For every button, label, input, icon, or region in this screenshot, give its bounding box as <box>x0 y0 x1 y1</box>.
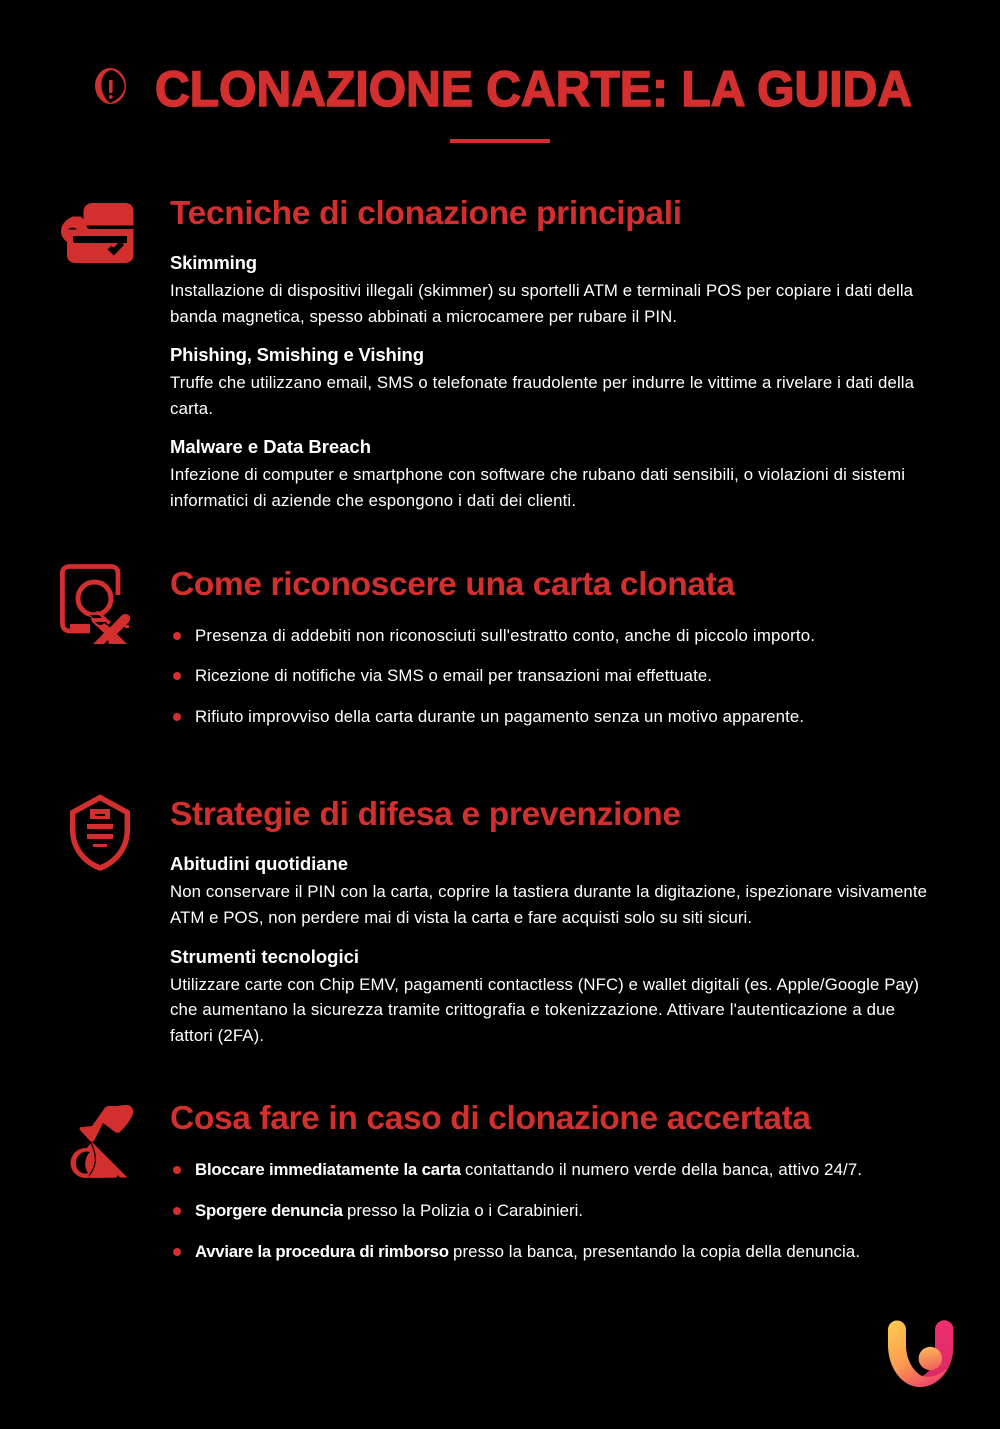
subsection: abitudini <box>170 853 927 927</box>
heading: Strategie di difesa e prevenzione <box>170 796 681 833</box>
subsection: abitudini: ATM e POS, non perdere mai di vista la carta e fare acquisti solo su siti sicuri. <box>170 908 752 927</box>
bullet list: Ricezione di notifiche via SMS o email per transazioni mai effettuate. <box>195 666 712 685</box>
subsection: strumenti: Utilizzare carte con Chip EMV, pagamenti contactless (NFC) e wallet digitali (es. Apple/Google Pay) <box>170 975 919 994</box>
panel: strategie di difesa <box>73 796 927 1045</box>
icon: shield <box>73 798 127 868</box>
bullet list: Sporgere denuncia <box>195 1201 344 1220</box>
subsection: malware: informatici di aziende che espongono i dati dei clienti. <box>170 491 576 510</box>
header <box>95 61 912 143</box>
subsection: skimming <box>170 252 914 326</box>
subsection: skimming: Installazione di dispositivi illegali (skimmer) su sportelli ATM e terminali POS per copiare i dati della <box>170 281 914 300</box>
bullet list: Bloccare immediatamente la carta <box>195 1160 462 1179</box>
title underline <box>450 139 550 143</box>
subsection: malware <box>170 436 905 510</box>
subsection: phishing <box>170 344 915 418</box>
subsection: malware: Infezione di computer e smartphone con software che rubano dati sensibili, o violazioni di sistemi <box>170 465 905 484</box>
subsection: abitudini: Non conservare il PIN con la carta, coprire la tastiera durante la digitazione, ispezionare visivamente <box>170 882 927 901</box>
subsection: strumenti <box>170 946 919 1045</box>
panel: riconoscere una carta clonata <box>62 566 815 726</box>
bullet list: presso la banca, presentando la copia della denuncia. <box>453 1242 860 1261</box>
bullet list: Presenza di addebiti non riconosciuti sull'estratto conto, anche di piccolo importo. <box>195 626 815 645</box>
icon: credit card <box>61 203 134 263</box>
heading: Cosa fare in caso di clonazione accertata <box>170 1100 811 1137</box>
panel: tecniche di clonazione <box>61 195 915 510</box>
bullet list: contattando il numero verde della banca, attivo 24/7. <box>465 1160 862 1179</box>
logo <box>888 1320 954 1387</box>
icon: check, shield and warning <box>70 1105 133 1178</box>
subsection: strumenti: fattori (2FA). <box>170 1026 264 1045</box>
subsection: abitudini: Abitudini quotidiane <box>170 853 348 874</box>
subsection: strumenti: che aumentano la sicurezza tramite crittografia e tokenizzazione. Attivare l'autenticazione a due <box>170 1000 895 1019</box>
bullet list: presso la Polizia o i Carabinieri. <box>347 1201 583 1220</box>
title: CLONAZIONE CARTE: LA GUIDA <box>155 61 912 117</box>
panel: cosa fare <box>70 1100 862 1261</box>
icon: alert <box>95 68 126 104</box>
subsection: phishing: carta. <box>170 399 213 418</box>
bullet list: Avviare la procedura di rimborso <box>195 1242 449 1261</box>
subsection: malware: Malware e Data Breach <box>170 436 371 457</box>
heading: Come riconoscere una carta clonata <box>170 566 735 603</box>
subsection: skimming: Skimming <box>170 252 257 273</box>
icon: magnifier on card with cross <box>62 566 130 644</box>
bullet list <box>173 1160 862 1261</box>
subsection: skimming: banda magnetica, spesso abbinati a microcamere per rubare il PIN. <box>170 307 677 326</box>
heading: Tecniche di clonazione principali <box>170 195 682 232</box>
subsection: phishing: Phishing, Smishing e Vishing <box>170 344 424 365</box>
bullet list: Rifiuto improvviso della carta durante un pagamento senza un motivo apparente. <box>195 707 804 726</box>
subsection: strumenti: Strumenti tecnologici <box>170 946 359 967</box>
subsection: phishing: Truffe che utilizzano email, SMS o telefonate fraudolente per indurre le vittime a rivelare i dati della <box>170 373 915 392</box>
bullet list <box>173 626 815 726</box>
